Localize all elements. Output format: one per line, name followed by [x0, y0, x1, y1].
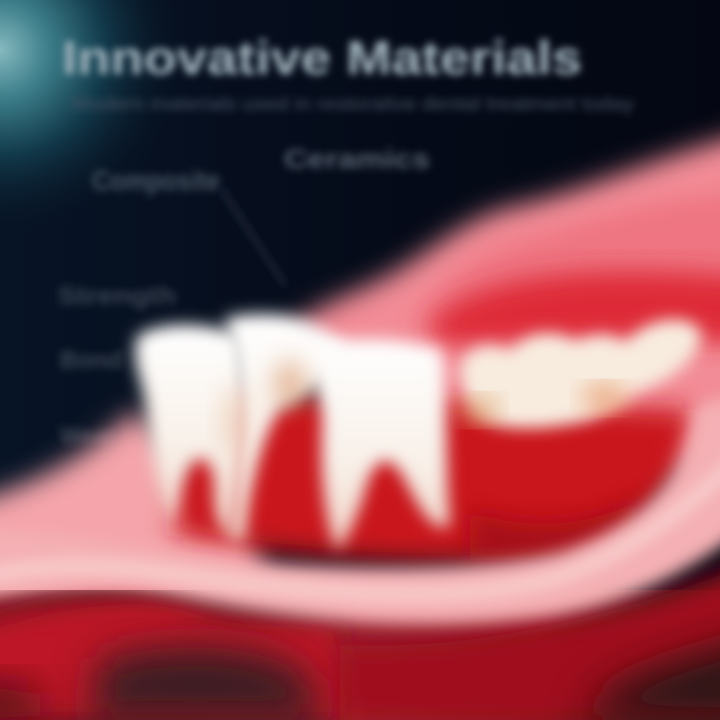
lower gum band: [0, 385, 720, 624]
subtitle: Modern materials used in restorative dental treatment today: [72, 94, 634, 114]
tooth: second molar: [225, 314, 345, 540]
lower red tissue: [0, 550, 720, 720]
side labels: Strength: [58, 283, 176, 310]
side labels: [58, 283, 176, 450]
red pocket behind teeth: [170, 390, 690, 562]
label: upper left: Composite: [92, 165, 220, 196]
tooth: first molar: [135, 325, 245, 531]
tooth: third molar: [312, 339, 450, 550]
label: upper centre: Ceramics: [284, 144, 430, 174]
leader line: [222, 190, 285, 285]
large teeth: [135, 314, 450, 550]
side labels: Wear: [60, 423, 116, 450]
small teeth row: [461, 320, 701, 428]
base tissue along the bottom edge: [0, 590, 720, 720]
lower left gum: [0, 410, 260, 620]
title: Innovative Materials: [62, 31, 582, 84]
root shading: [229, 361, 304, 455]
side labels: Bond: [60, 347, 122, 374]
upper gum: [290, 125, 720, 480]
